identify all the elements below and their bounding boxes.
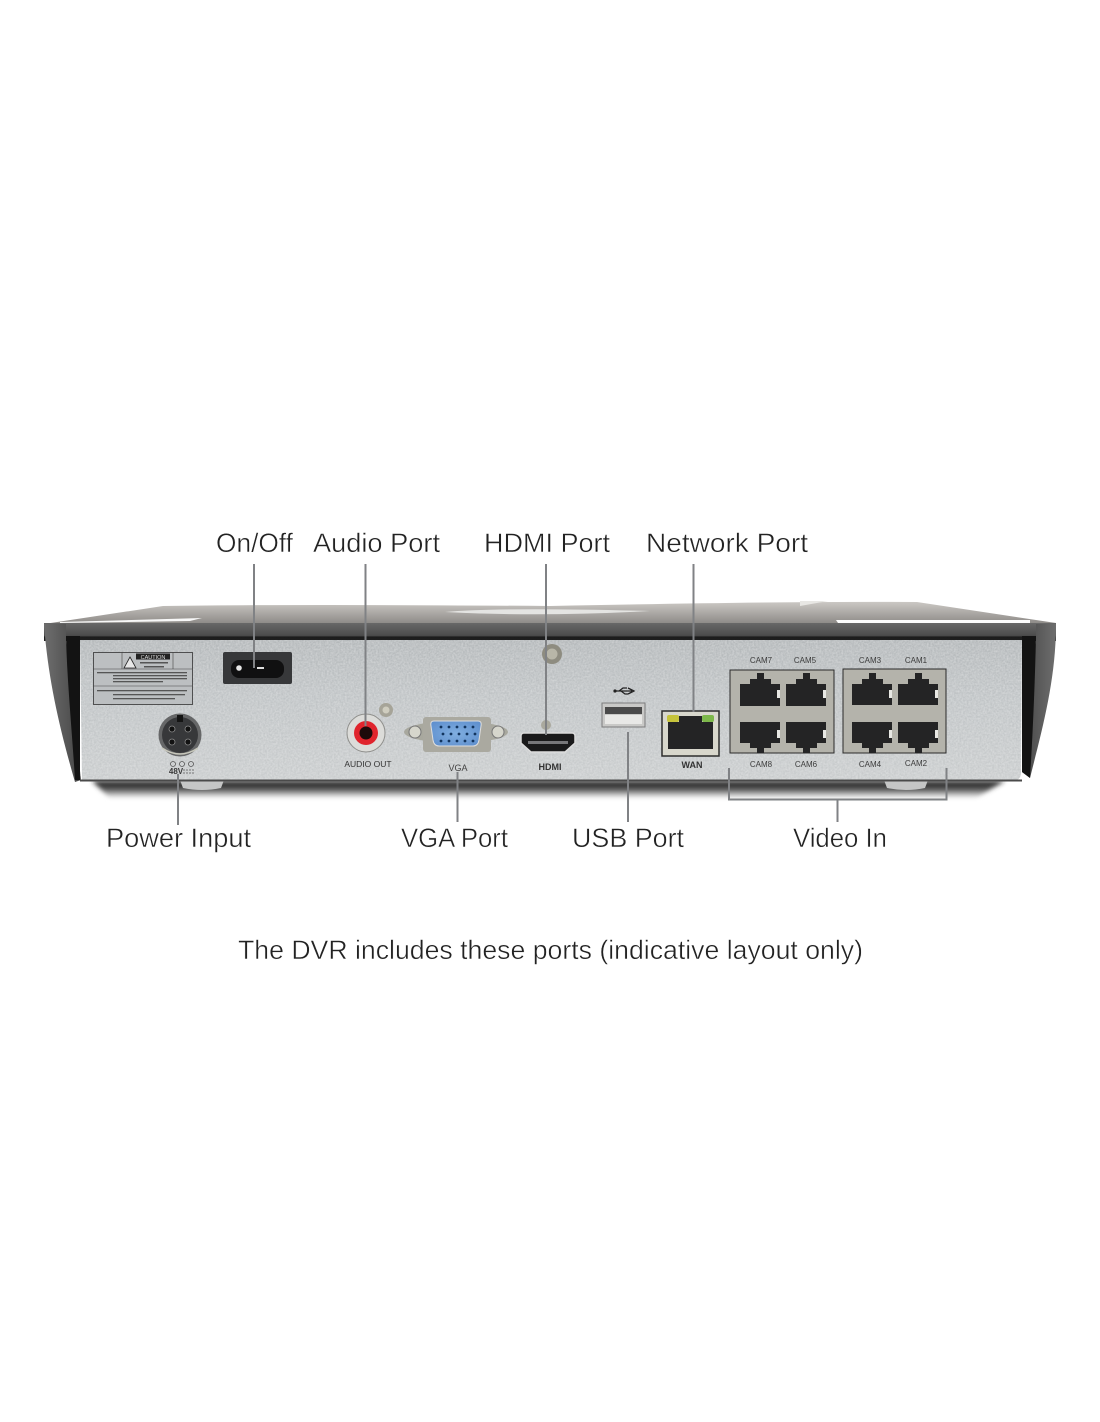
video in ethernet group: CAM7 CAM5 CAM8 CAM6: CAM5 (794, 656, 817, 665)
VGA port (404, 717, 508, 773)
right side wall (1022, 624, 1056, 778)
power input connector (158, 714, 202, 776)
label: On/Off: On/Off (216, 528, 293, 558)
audio out RCA jack (344, 703, 393, 769)
caption: The DVR includes these ports (indicative layout only) (238, 935, 863, 965)
left side wall (44, 624, 81, 782)
video in ethernet group: CAM7 CAM5 CAM8 CAM6: CAM6 (795, 760, 818, 769)
video in ethernet group: CAM7 CAM5 CAM8 CAM6: CAM8 (750, 760, 773, 769)
VGA port: VGA (448, 763, 468, 773)
label: Video In: Video In (793, 823, 887, 853)
video in ethernet group: CAM3 CAM1 CAM4 CAM2 (843, 656, 946, 769)
caution label (93, 652, 192, 704)
video in ethernet group: CAM3 CAM1 CAM4 CAM2: CAM4 (859, 760, 882, 769)
video in ethernet group: CAM7 CAM5 CAM8 CAM6: CAM7 (750, 656, 773, 665)
top surface (44, 602, 1056, 624)
USB port (602, 688, 645, 727)
label: Network Port: Network Port (646, 528, 809, 558)
label: Power Input: Power Input (106, 823, 251, 853)
label: USB Port: USB Port (572, 823, 684, 853)
DVR device photo (44, 601, 1056, 798)
label: HDMI Port: HDMI Port (484, 528, 610, 558)
WAN network port (662, 711, 719, 770)
video in ethernet group: CAM7 CAM5 CAM8 CAM6 (730, 656, 834, 769)
video in ethernet group: CAM3 CAM1 CAM4 CAM2: CAM2 (905, 759, 928, 768)
shadow beneath device (92, 781, 1005, 798)
front top band (44, 623, 1056, 641)
caution label: CAUTION (141, 655, 165, 661)
rubber feet (180, 780, 928, 790)
video in ethernet group: CAM3 CAM1 CAM4 CAM2: CAM1 (905, 656, 928, 665)
label: VGA Port: VGA Port (401, 823, 508, 853)
HDMI port: HDMI (538, 762, 562, 772)
leader lines (178, 564, 946, 825)
HDMI port (521, 644, 575, 772)
power input connector: 48V (169, 767, 184, 776)
audio out RCA jack: AUDIO OUT (344, 759, 392, 769)
label: Audio Port: Audio Port (313, 528, 440, 558)
video in ethernet group: CAM3 CAM1 CAM4 CAM2: CAM3 (859, 656, 882, 665)
rear metal plate (80, 640, 1022, 780)
WAN network port: WAN (682, 760, 702, 770)
on/off rocker switch (223, 652, 292, 684)
